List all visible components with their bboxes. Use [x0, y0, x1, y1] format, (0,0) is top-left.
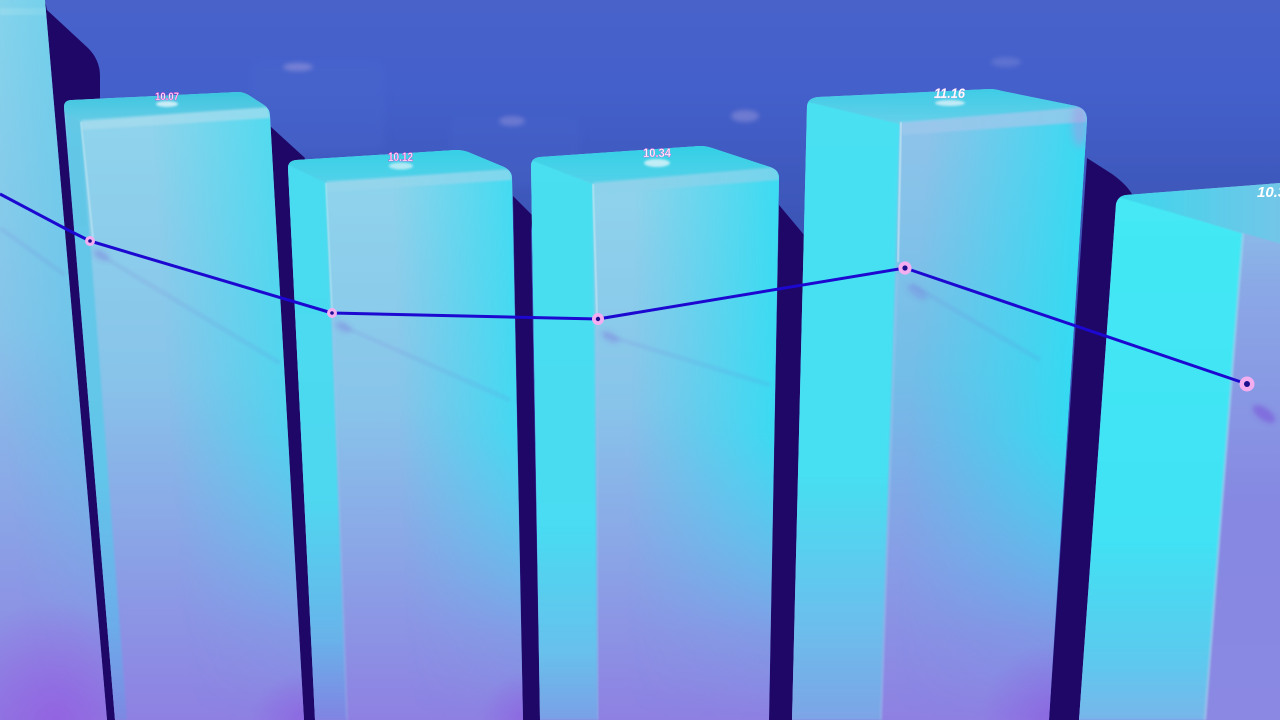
- bar 3: value 10.12: [280, 146, 530, 720]
- background ghost bars and labels: [250, 57, 1021, 188]
- value labels: 10.34: [643, 146, 671, 160]
- bar 1: cut off at left edge: [0, 0, 110, 720]
- value labels: 11.16: [934, 85, 965, 101]
- line shadow on bars: [0, 228, 1040, 400]
- bar 5: value 11.16: [785, 85, 1090, 720]
- line series: [0, 194, 1247, 384]
- value labels: 10.07: [155, 91, 179, 103]
- bar 6: value 10.3, cut off at right edge: [1075, 178, 1280, 720]
- bar 4: value 10.34: [525, 142, 783, 720]
- value labels: [155, 85, 1280, 201]
- data point markers: [85, 236, 1254, 392]
- marker shadow blobs: [91, 246, 1278, 426]
- value labels: 10.12: [388, 152, 413, 164]
- bar 2: value 10.07: [60, 88, 310, 720]
